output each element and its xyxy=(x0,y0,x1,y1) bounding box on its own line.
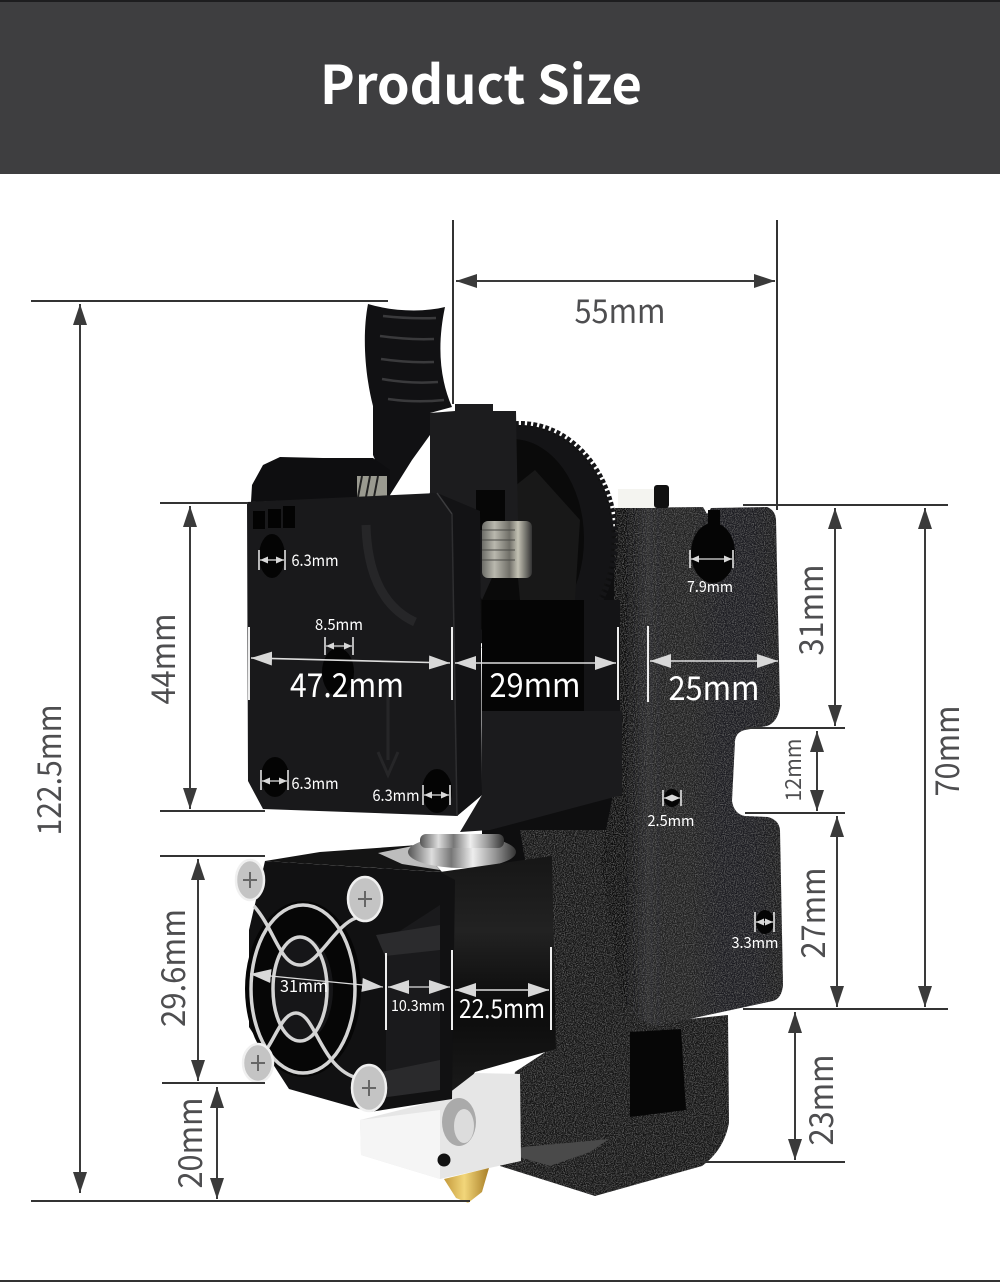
annotation: 2.5mm: 2.5mm xyxy=(648,810,694,831)
lower bracket housing xyxy=(500,830,729,1196)
bottom border line xyxy=(0,1280,1000,1282)
dimension: 20mm: 20mm xyxy=(164,1098,212,1188)
header banner xyxy=(0,0,1000,174)
chrome wire guard xyxy=(251,905,356,1077)
dimension: 23mm: 23mm xyxy=(795,1054,843,1146)
dimension: 44mm: 44mm xyxy=(137,614,185,704)
annotation: 6.3mm upper left hole: 6.3mm xyxy=(292,547,338,571)
white bearing cap xyxy=(618,485,669,508)
annotation: 29mm: 29mm xyxy=(490,659,580,707)
annotation: 2.5mm xyxy=(648,790,694,831)
product photo: extruder assembly xyxy=(236,304,783,1203)
dimension: 12mm xyxy=(745,731,845,813)
front plate xyxy=(247,493,482,816)
backing dark mass xyxy=(482,530,660,1049)
annotation: 7.9mm: 7.9mm xyxy=(687,576,733,597)
annotation: 3.3mm xyxy=(732,912,778,953)
annotation: 25mm: 25mm xyxy=(668,662,760,710)
title: Product Size xyxy=(320,44,642,120)
annotation: 7.9mm xyxy=(687,550,733,597)
brass nozzle xyxy=(444,1168,489,1203)
annotation: 22.5mm: 22.5mm xyxy=(459,989,545,1026)
annotation: 47.2mm: 47.2mm xyxy=(290,659,404,707)
aluminium heater block xyxy=(360,1073,521,1179)
annotation: 31mm fan: 31mm xyxy=(280,972,328,997)
dark side strip behind recess xyxy=(482,600,620,712)
dimension: 29.6mm: 29.6mm xyxy=(147,909,195,1027)
annotation: 6.3mm lower left hole xyxy=(261,770,338,794)
adjusting knob and spring xyxy=(251,457,390,502)
annotation: 3.3mm: 3.3mm xyxy=(732,932,778,953)
embossed straight arrow xyxy=(378,690,398,775)
annotation: 6.3mm lower left hole: 6.3mm xyxy=(292,770,338,794)
plate small holes xyxy=(664,789,774,934)
drive gear xyxy=(426,425,614,653)
fan body xyxy=(245,861,455,1112)
central block xyxy=(430,404,518,600)
annotation: 8.5mm xyxy=(315,613,363,655)
thumb lever xyxy=(365,304,452,495)
dimension: overall height 122.5mm: 122.5mm xyxy=(23,704,71,836)
annotation: 6.3mm lower right hole: 6.3mm xyxy=(372,782,420,806)
fan screws xyxy=(236,860,386,1111)
embossed curved arrow xyxy=(366,525,415,622)
dimension: 27mm: 27mm xyxy=(787,868,835,958)
three small squares xyxy=(253,506,295,529)
plate slot hole xyxy=(691,510,735,583)
annotation: 47.2mm xyxy=(249,627,452,707)
lower block xyxy=(460,711,622,832)
annotation: 31mm fan xyxy=(250,972,383,997)
dimension: 12mm: 12mm xyxy=(776,738,808,802)
annotation: 6.3mm upper left hole xyxy=(259,547,338,571)
right mounting plate xyxy=(600,507,783,1026)
annotation: 6.3mm lower right hole xyxy=(372,782,450,806)
dimension: width 55mm: 55mm xyxy=(574,285,666,333)
annotation: 8.5mm: 8.5mm xyxy=(315,613,363,635)
annotation: 10.3mm xyxy=(386,950,452,1030)
knurled shaft xyxy=(482,521,532,578)
recessed black gap xyxy=(482,600,584,712)
annotation: 22.5mm xyxy=(455,947,551,1030)
heatsink xyxy=(440,856,556,1106)
dimension: 31mm right: 31mm xyxy=(785,564,833,656)
annotation: 10.3mm: 10.3mm xyxy=(391,995,445,1016)
silver heat-break collar xyxy=(265,834,516,872)
plate holes xyxy=(259,534,452,813)
annotation: 25mm xyxy=(648,626,778,710)
dimension: 70mm: 70mm xyxy=(921,706,969,796)
